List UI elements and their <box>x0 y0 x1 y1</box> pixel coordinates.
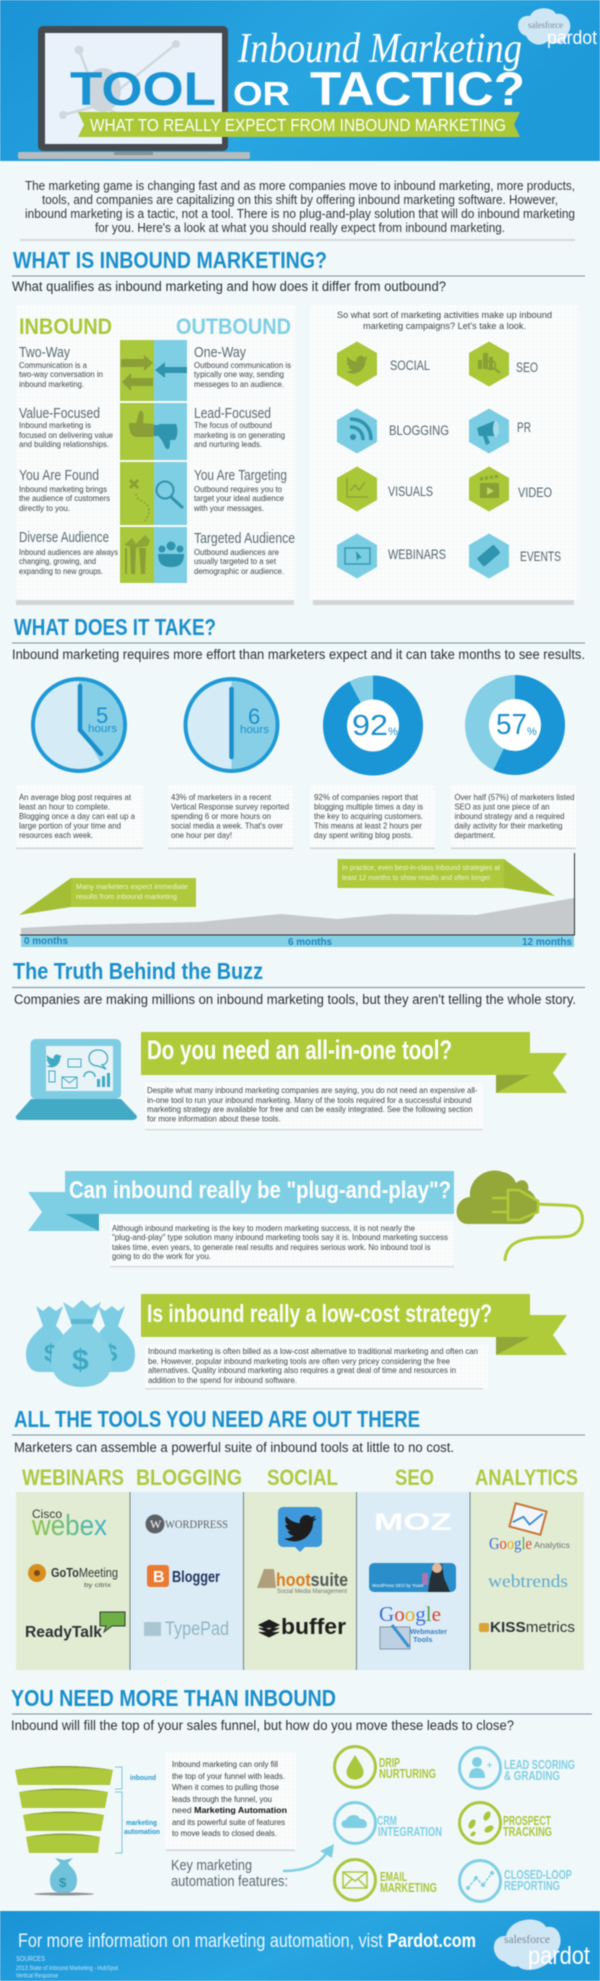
activity: visuals: VISUALS <box>388 484 433 499</box>
activity: webinars <box>337 534 446 578</box>
row: two-way: Two-Way <box>19 344 70 361</box>
feature: prospect tracking: TRACKING <box>503 1824 552 1839</box>
bag left <box>26 1306 70 1372</box>
stat text: blogging: 92% of companies report that <box>314 793 419 802</box>
row: you are found <box>19 467 110 513</box>
chart: results timeline <box>19 853 575 948</box>
banner: low-cost: Is inbound really a low-cost strategy? <box>147 1300 492 1328</box>
logo: cisco webex: webex <box>31 1510 107 1542</box>
row: you are targeting: target your ideal audience <box>194 494 284 503</box>
banner: low-cost <box>141 1294 567 1355</box>
title or: OR <box>233 75 290 112</box>
column headings: BLOGGING <box>136 1465 242 1490</box>
funnel brackets: inbound <box>130 1773 156 1782</box>
feature: email marketing: EMAIL <box>380 1869 407 1884</box>
icon: cloud plug <box>457 1170 582 1261</box>
logo: blogger: Blogger <box>172 1569 220 1586</box>
feature: closed-loop reporting: REPORTING <box>504 1878 560 1893</box>
activities intro: So what sort of marketing activities make up inbound <box>337 310 552 321</box>
icon: diverse audience <box>124 535 150 574</box>
row: lead-focused: marketing is on generating <box>194 431 285 440</box>
feature: email marketing <box>334 1860 437 1900</box>
text: key features label <box>171 1858 288 1890</box>
feature: prospect tracking <box>460 1802 552 1844</box>
arrow to features <box>283 1844 334 1871</box>
logo: hootsuite: Social Media Management <box>277 1589 347 1595</box>
chart: 92% donut: % <box>388 726 398 738</box>
row: two-way: inbound marketing. <box>19 380 84 389</box>
text: marketing automation: When it comes to pulling those <box>172 1782 279 1792</box>
activity: video <box>469 466 552 512</box>
sources: Vertical Response <box>16 1974 59 1980</box>
logo: readytalk <box>25 1612 125 1641</box>
logo: gotomeeting: GoToMeeting <box>51 1566 118 1580</box>
intro text: tools, and companies are capitalizing on this shift by offering inbound marketing software. However, <box>42 192 558 207</box>
text: low-cost: addition to the spend for inbound software. <box>148 1376 297 1385</box>
chart: 92% donut: 92 <box>352 710 388 742</box>
logo: moz: MOZ <box>374 1509 452 1536</box>
chart: 57% donut: 57 <box>496 709 527 741</box>
column headings: ANALYTICS <box>475 1465 578 1490</box>
logo: readytalk: ReadyTalk <box>25 1624 102 1641</box>
chart: sales funnel <box>15 1766 160 1896</box>
row: lead-focused: The focus of outbound <box>194 421 272 430</box>
text: plug-and-play: going to do the work for you. <box>112 1252 211 1261</box>
funnel brackets <box>115 1767 160 1853</box>
row: value-focused: Value-Focused <box>19 405 100 422</box>
logo: wordpress: WORDPRESS <box>165 1517 228 1531</box>
stat text: blog post: Blogging once a day can eat up a <box>19 812 135 821</box>
sources: 2013 State of Inbound Marketing - HubSpot <box>16 1966 118 1972</box>
activities intro: marketing campaigns? Let's take a look. <box>363 321 526 332</box>
logo: salesforce pardot: pardot <box>547 28 598 49</box>
row: you are found: directly to you. <box>19 504 70 513</box>
logo: blogger: B <box>153 1569 165 1586</box>
text: key features label: automation features: <box>171 1874 288 1890</box>
logo: cisco webex: Cisco <box>32 1507 62 1521</box>
column headings: WEBINARS <box>22 1465 124 1490</box>
row: targeted audience <box>194 530 295 576</box>
heading: what is inbound marketing: WHAT IS INBOUND MARKETING? <box>13 247 327 273</box>
text: all-in-one: in-one tool to run your inbound marketing. Many of the tools required for a successful inbound <box>147 1096 472 1105</box>
column headings <box>22 1465 578 1490</box>
text: low-cost: alternatives. Quality inbound marketing also requires a great deal of time and resources in <box>148 1366 456 1375</box>
text: low-cost <box>145 1344 488 1390</box>
row: you are targeting: You Are Targeting <box>194 467 287 484</box>
title script: Inbound Marketing <box>237 26 522 72</box>
stat text: social media: spending 6 or more hours on <box>171 812 271 821</box>
header banner <box>0 0 600 161</box>
comparison strips <box>120 340 187 583</box>
activity: seo <box>469 342 538 386</box>
row: two-way <box>19 344 103 389</box>
subheading: What qualifies as inbound marketing and how does it differ from outbound? <box>12 279 446 294</box>
row: targeted audience: demographic or audience. <box>194 567 284 576</box>
logo: webtrends: webtrends <box>488 1571 568 1591</box>
row: you are targeting <box>193 467 287 513</box>
row: one-way: typically one way, sending <box>194 370 284 379</box>
logo: hootsuite: hootsuite <box>276 1570 348 1590</box>
row: one-way <box>194 344 291 389</box>
bag right <box>91 1306 135 1372</box>
row: value-focused: Inbound marketing is <box>19 421 91 430</box>
logo: buffer: buffer <box>281 1614 346 1639</box>
text: marketing automation: leads through the funnel, you <box>172 1794 272 1804</box>
activity: events <box>469 534 561 578</box>
feature: lead scoring: & GRADING <box>504 1768 560 1783</box>
title tool: TOOL <box>70 62 216 115</box>
subtitle ribbon: WHAT TO REALLY EXPECT FROM INBOUND MARKETING <box>90 115 506 135</box>
callout: immediate results: results from inbound marketing <box>76 892 177 901</box>
text: plug-and-play: Although inbound marketing is the key to modern marketing success, it is not nearly the <box>112 1224 415 1233</box>
text: marketing automation: Inbound marketing can only fill <box>172 1759 278 1769</box>
chart: 57% donut <box>477 687 553 763</box>
sources <box>16 1956 118 1980</box>
activities intro <box>337 310 552 332</box>
row: diverse audience <box>19 529 118 576</box>
axis labels: 12 months <box>522 936 572 948</box>
text: low-cost: Inbound marketing is often billed as a low-cost alternative to traditional marketing and often can <box>148 1347 478 1356</box>
row: targeted audience: Outbound audiences are <box>194 548 279 557</box>
heading: truth behind the buzz: The Truth Behind the Buzz <box>13 958 263 984</box>
chart: 92% donut <box>335 688 411 764</box>
footer <box>0 1911 600 1981</box>
text: plug-and-play <box>110 1221 454 1268</box>
row: value-focused: and building relationships. <box>19 440 109 449</box>
activity: seo: SEO <box>516 360 538 375</box>
stat text: blogging: the key to acquiring customers. <box>314 812 423 821</box>
icon: laptop with apps <box>16 1039 137 1120</box>
stat text: seo: SEO as just one piece of an <box>454 802 550 812</box>
logo: gotomeeting: by citrix <box>84 1582 112 1589</box>
row: lead-focused <box>194 405 285 449</box>
text: plug-and-play: takes time, even years, to generate real results and requires serious work. No inbound tool is <box>112 1243 430 1252</box>
text: marketing automation: and its powerful suite of features <box>172 1817 285 1827</box>
banner: all-in-one: Do you need an all-in-one tool? <box>147 1035 452 1065</box>
activity: social: SOCIAL <box>390 358 430 373</box>
icon: laptop <box>18 26 250 159</box>
feature: closed-loop reporting <box>460 1860 572 1902</box>
feature: closed-loop reporting: CLOSED-LOOP <box>504 1867 572 1882</box>
row: you are targeting: with your messages. <box>193 504 264 513</box>
chart: 5 hours clock <box>33 679 125 771</box>
feature: crm integration: INTEGRATION <box>378 1824 442 1839</box>
activity: pr <box>469 408 531 454</box>
feature: drip nurturing: NURTURING <box>379 1766 436 1781</box>
stat text: blog post: resources each week. <box>19 831 93 840</box>
text: marketing automation <box>165 1752 296 1851</box>
heading: you need more than inbound: YOU NEED MORE THAN INBOUND <box>11 1685 336 1711</box>
activity: blogging <box>337 408 449 454</box>
text: all-in-one <box>145 1083 483 1130</box>
activity: visuals <box>337 466 433 512</box>
subheading: Companies are making millions on inbound marketing tools, but they aren't telling the whole story. <box>14 992 576 1007</box>
feature: lead scoring <box>460 1748 575 1788</box>
callout: immediate results: Many marketers expect immediate <box>76 882 188 891</box>
icon: money bags: $ <box>44 1340 58 1367</box>
feature: email marketing: MARKETING <box>380 1880 437 1895</box>
logo: wordpress <box>146 1514 228 1534</box>
chart: 5 hours clock: 5 <box>96 703 108 728</box>
icon: arrows <box>121 355 187 391</box>
panel: inbound vs outbound <box>16 305 295 605</box>
feature: prospect tracking: PROSPECT <box>503 1813 551 1828</box>
axis labels: 0 months <box>24 935 68 947</box>
feature: drip nurturing <box>334 1746 436 1788</box>
row: diverse audience: changing, growing, and <box>19 557 96 566</box>
banner: all-in-one <box>141 1032 567 1093</box>
row: you are found: the audience of customers <box>19 494 110 503</box>
logo: salesforce pardot: salesforce <box>504 1932 550 1946</box>
text: key features label: Key marketing <box>171 1858 252 1874</box>
panel: marketing activities <box>310 305 578 605</box>
row: diverse audience: Inbound audiences are always <box>19 548 118 557</box>
chart: 6 hours clock: 6 <box>248 704 260 729</box>
text: marketing automation: need Marketing Automation <box>172 1805 287 1815</box>
activity: pr: PR <box>517 420 531 435</box>
text: all-in-one: Despite what many inbound marketing companies are saying, you do not need an expensive all- <box>147 1086 478 1095</box>
icon: magnifier <box>156 482 183 508</box>
logo: typepad <box>144 1619 229 1640</box>
activity: webinars: WEBINARS <box>388 547 446 562</box>
logo: gotomeeting <box>28 1564 118 1589</box>
text: marketing automation: the top of your funnel with leads. <box>172 1771 285 1781</box>
logo: hootsuite <box>257 1569 348 1595</box>
banner: plug-and-play: Can inbound really be "plug-and-play"? <box>69 1177 451 1204</box>
row: you are found: Inbound marketing brings <box>19 485 107 494</box>
banner: plug-and-play <box>28 1171 454 1231</box>
logo: google analytics: Google <box>489 1534 532 1553</box>
logo: google analytics <box>489 1503 570 1553</box>
activity: events: EVENTS <box>520 549 561 564</box>
chart: 6 hours clock <box>186 679 278 771</box>
text: low-cost: be. However, popular inbound marketing tools are often very pricey considering the free <box>148 1357 450 1366</box>
row: targeted audience: usually targeted to a set <box>194 557 277 566</box>
feature: crm integration <box>334 1802 442 1844</box>
heading: what does it take: WHAT DOES IT TAKE? <box>14 614 216 640</box>
row: one-way: Outbound communication is <box>194 361 291 370</box>
logo: google analytics: Analytics <box>534 1540 570 1550</box>
row: you are targeting: Outbound requires you to <box>194 485 282 494</box>
text: marketing automation: to move leads to closed deals. <box>172 1828 277 1838</box>
icon: target audience <box>158 542 184 567</box>
heading: all the tools: ALL THE TOOLS YOU NEED ARE OUT THERE <box>14 1406 420 1432</box>
callout: 12 months: least 12 months to show results and often longer. <box>342 873 492 882</box>
row: diverse audience: Diverse Audience <box>19 529 109 546</box>
chart: 5 hours clock: hours <box>88 723 118 735</box>
chart: 6 hours clock: hours <box>240 724 270 736</box>
logo: blogger <box>147 1565 220 1587</box>
intro text <box>25 178 575 235</box>
subheading: Inbound will fill the top of your sales funnel, but how do you move these leads to close? <box>11 1718 514 1733</box>
stat text: social media: social media a week. That's over <box>171 822 283 830</box>
stat text: blogging: This means at least 2 hours per <box>314 822 422 830</box>
stat text: seo: Over half (57%) of marketers listed <box>454 793 575 802</box>
row: one-way: messeges to an audience. <box>194 380 284 389</box>
intro text: for you. Here's a look at what you should really expect from inbound marketing. <box>95 220 505 235</box>
logo: google webmaster tools: Webmaster <box>410 1627 447 1636</box>
stat text: social media <box>168 785 293 849</box>
icon: money bags: $ <box>104 1340 118 1367</box>
logo: salesforce pardot <box>494 1920 590 1970</box>
title tactic: TACTIC? <box>310 62 525 115</box>
callout: 12 months <box>338 859 555 896</box>
column headings: SEO <box>395 1465 434 1490</box>
row: two-way: Communication is a <box>19 361 87 370</box>
logo: wordpress: W <box>150 1517 162 1531</box>
stat text: blog post: large portion of your time and <box>19 822 121 830</box>
feature: crm integration: CRM <box>377 1813 397 1828</box>
logo: typepad: TypePad <box>165 1619 229 1640</box>
logo: google webmaster tools <box>379 1602 447 1649</box>
icon: thumbs <box>129 411 177 449</box>
stat text: seo <box>451 785 576 849</box>
row: two-way: two-way conversation in <box>19 370 103 379</box>
funnel brackets: marketing <box>126 1818 157 1827</box>
row: value-focused: focused on delivering value <box>19 431 113 440</box>
icon: money bag: $ <box>59 1875 67 1890</box>
logo: wordpress seo by yoast: WordPress SEO by Yoast <box>372 1583 424 1588</box>
subheading: Marketers can assemble a powerful suite of inbound tools at little to no cost. <box>14 1440 454 1455</box>
logo: salesforce pardot: salesforce <box>528 20 563 31</box>
text: all-in-one: for more information about these tools. <box>147 1114 280 1124</box>
stat text: social media: one hour per day! <box>171 831 232 840</box>
stat text: blogging: blogging multiple times a day is <box>314 802 423 812</box>
text: plug-and-play: "plug-and-play" type solution many inbound marketing tools say it is. Inbound marketing success <box>112 1233 448 1242</box>
icon: money bags <box>26 1300 135 1387</box>
stat text: blog post: least an hour to complete. <box>19 802 110 812</box>
row: value-focused <box>19 405 113 449</box>
activity: blogging: BLOGGING <box>389 423 449 438</box>
funnel brackets: automation <box>124 1827 160 1836</box>
callout: 12 months: In practice, even best-in-class inbound strategies at <box>342 863 501 872</box>
stat text: blog post: An average blog post requires at <box>19 793 132 802</box>
row: lead-focused: Lead-Focused <box>194 405 271 422</box>
row: diverse audience: expanding to new groups. <box>19 567 103 576</box>
row: targeted audience: Targeted Audience <box>194 530 295 547</box>
logo: google webmaster tools: Tools <box>413 1635 432 1644</box>
logo: salesforce pardot <box>518 8 598 49</box>
text: all-in-one: marketing strategy are available for free and can be easily integrated. See the following section <box>147 1105 473 1114</box>
row: lead-focused: and nurturing leads. <box>194 440 262 449</box>
activity: social <box>337 342 430 386</box>
stat text: social media: 43% of marketers in a recent <box>171 793 272 802</box>
icon: treasure map <box>130 480 149 521</box>
logo: wordpress seo by yoast <box>369 1563 456 1592</box>
logo: twitter <box>278 1507 322 1552</box>
column headings: SOCIAL <box>267 1465 338 1490</box>
logo: salesforce pardot: pardot <box>528 1942 590 1970</box>
bag centre: $ <box>72 1344 89 1377</box>
stat text: seo: daily activity for their marketing <box>454 822 563 830</box>
row: you are found: You Are Found <box>19 467 99 484</box>
inbound heading: INBOUND <box>19 314 112 339</box>
axis labels <box>24 935 572 948</box>
row: one-way: One-Way <box>194 344 246 361</box>
sources: SOURCES <box>16 1956 45 1963</box>
stat text: blogging: day spent writing blog posts. <box>314 831 413 840</box>
stat text: seo: department. <box>454 831 496 840</box>
call to action: For more information on marketing automation, vist Pardot.com <box>18 1931 476 1952</box>
stat text: social media: Vertical Response survey reported <box>171 802 289 812</box>
subheading: Inbound marketing requires more effort than marketers expect and it can take months to see results. <box>12 647 585 662</box>
logo: google webmaster tools: Google <box>379 1602 441 1626</box>
feature: drip nurturing: DRIP <box>379 1755 400 1770</box>
outbound heading: OUTBOUND <box>176 314 291 339</box>
stat text: blogging <box>310 785 435 849</box>
axis labels: 6 months <box>288 936 332 948</box>
icon: money bag <box>34 1858 94 1896</box>
activity: video: VIDEO <box>518 485 552 500</box>
stat text: seo: inbound strategy and a required <box>454 812 565 821</box>
stat text: blog post <box>16 785 143 849</box>
callout: immediate results <box>19 878 196 915</box>
panel: tools table <box>16 1465 584 1670</box>
chart: 57% donut: % <box>527 726 537 738</box>
logo: kissmetrics: KISSmetrics <box>490 1619 575 1636</box>
